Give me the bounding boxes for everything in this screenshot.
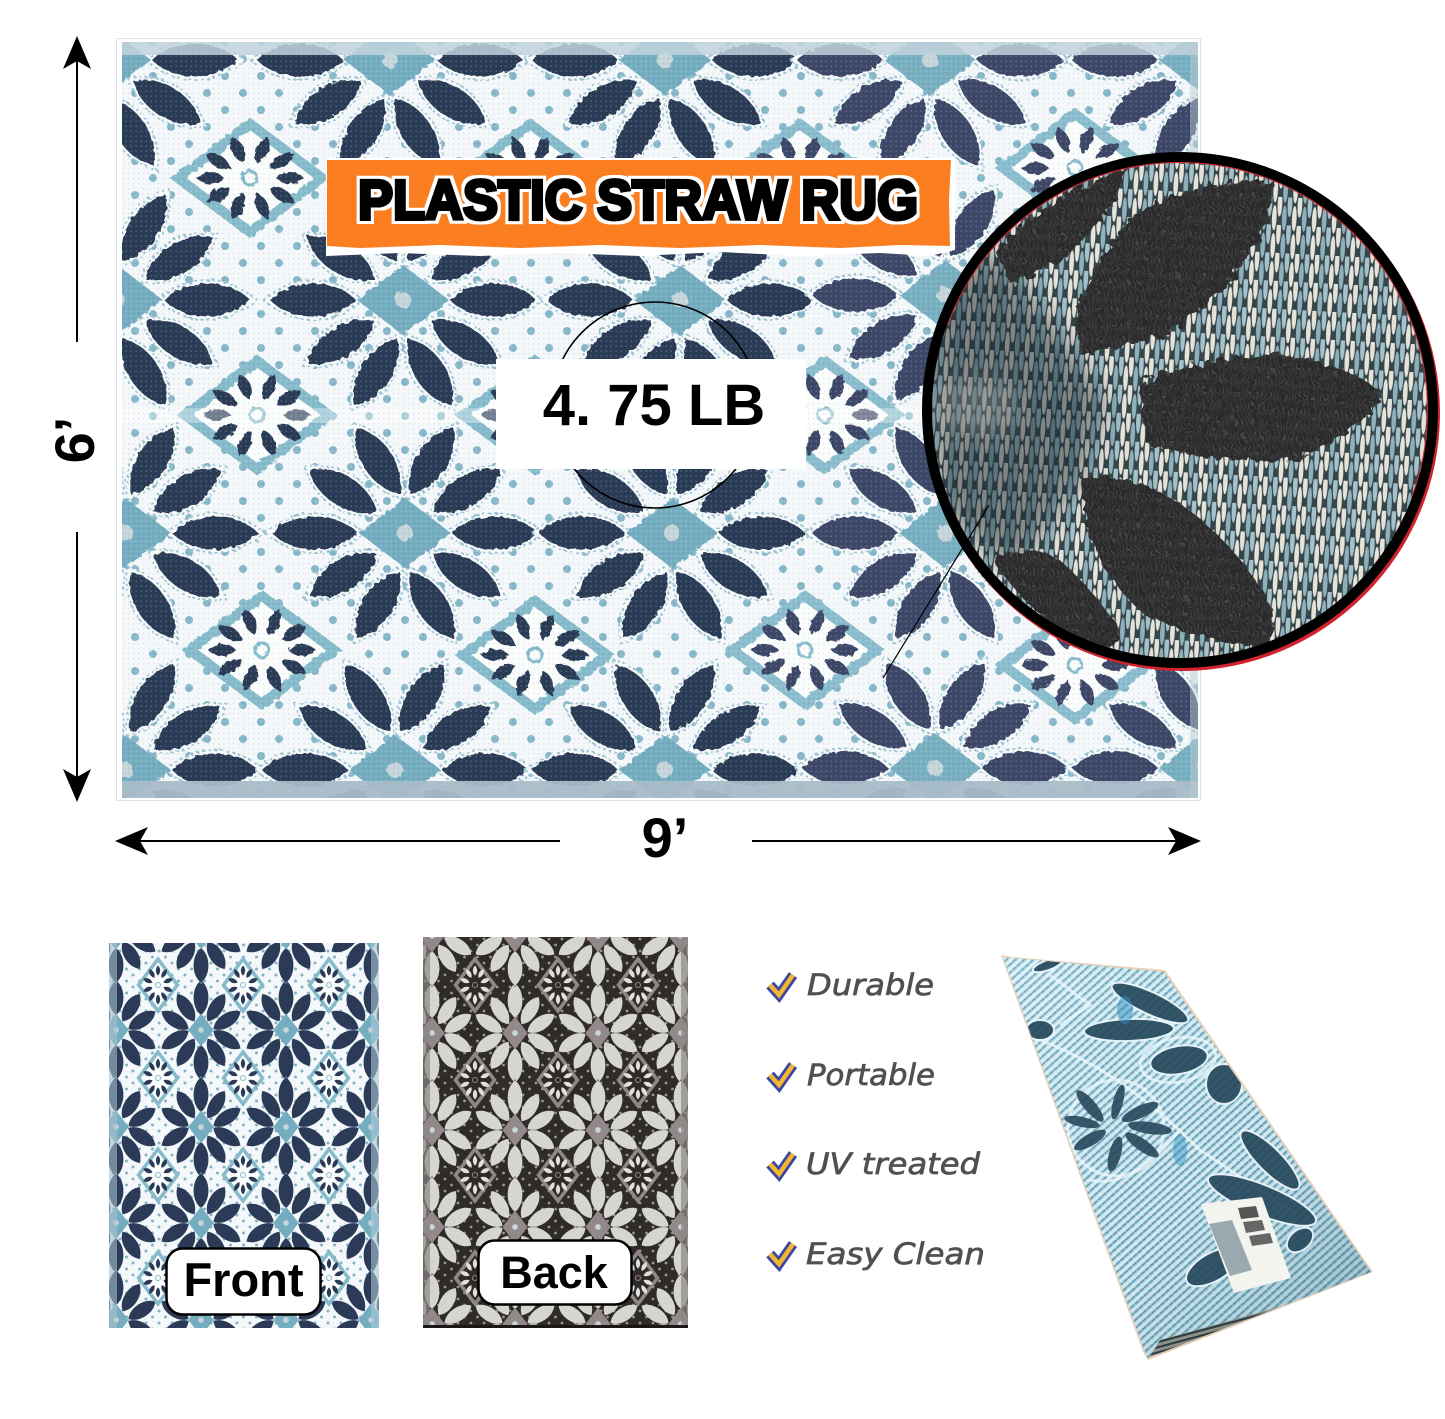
package label: [1201, 1197, 1291, 1293]
label: back: [478, 1240, 632, 1304]
callout: weight label: [496, 359, 806, 469]
label: height 6 feet: 6’: [43, 417, 106, 463]
label: width 9 feet: 9’: [642, 806, 688, 869]
feature: durable: Durable: [807, 968, 934, 1002]
panel: front of rug: [109, 943, 379, 1328]
title banner: plastic straw rug: PLASTIC STRAW RUG: [358, 168, 918, 231]
feature list: [770, 968, 985, 1271]
callout line from rug to detail circle: [883, 505, 989, 678]
label: front: Front: [183, 1253, 304, 1306]
callout: weight loupe circle: [552, 302, 758, 508]
zoomed weave detail circle: [922, 152, 1440, 671]
feature: durable: [770, 968, 934, 1002]
photo: folded rug package: [1000, 950, 1380, 1365]
title banner: plastic straw rug: [326, 158, 955, 256]
label: front: [166, 1248, 320, 1314]
arrow: width left: [115, 827, 560, 855]
feature: uv treated: UV treated: [806, 1147, 981, 1181]
feature: easy clean: Easy Clean: [806, 1237, 985, 1271]
panel: main rug with floral pattern: [116, 38, 1201, 801]
feature: portable: Portable: [807, 1058, 935, 1092]
arrow: width right: [752, 827, 1201, 855]
label: back: Back: [500, 1247, 609, 1298]
callout: weight label: 4. 75 LB: [543, 373, 765, 438]
arrow: height bottom: [63, 532, 91, 802]
panel: back of rug: [423, 937, 688, 1328]
arrow: height top: [63, 36, 91, 342]
